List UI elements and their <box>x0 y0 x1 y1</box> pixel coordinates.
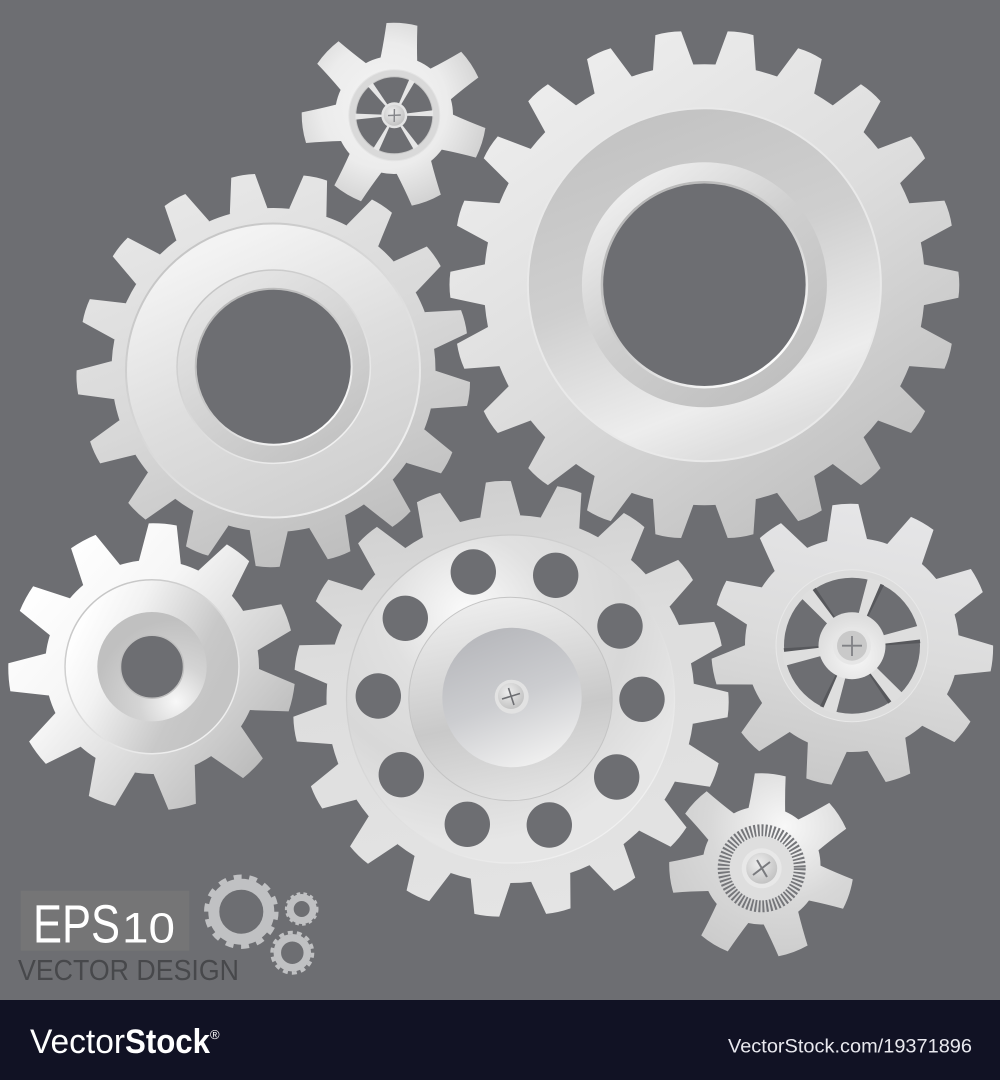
raised disc <box>65 580 239 754</box>
footer logo: VectorStock: Vector <box>30 1023 125 1061</box>
screw <box>495 680 529 714</box>
inner boss <box>409 597 612 801</box>
hole lip <box>582 162 827 407</box>
spokes <box>782 577 922 714</box>
gear: right with six spokes <box>707 500 997 790</box>
footer logo: VectorStock <box>30 1023 220 1061</box>
centre dish <box>442 628 582 767</box>
screw <box>742 848 782 888</box>
spoke ring <box>349 70 440 161</box>
gear: large top right with central hole <box>447 28 961 542</box>
footer logo: VectorStock: ® <box>210 1027 220 1042</box>
gear: large bottom centre with ring of holes <box>288 477 732 921</box>
hole lip <box>97 612 207 721</box>
icon: three small gears <box>206 877 317 973</box>
hole <box>602 182 807 387</box>
spoke ring <box>776 570 928 722</box>
hole <box>196 289 352 445</box>
badge: EPS10: 10 <box>122 905 175 953</box>
ten round holes <box>356 549 665 848</box>
gear: medium left with central hole <box>74 170 474 570</box>
gear: small top with spokes <box>299 20 489 210</box>
hole <box>120 635 184 698</box>
hub <box>818 612 886 679</box>
gear: small bottom right with knurled dial <box>669 773 853 956</box>
gear: left lower bright <box>5 520 299 814</box>
opening <box>356 77 433 154</box>
inner disc <box>730 836 794 900</box>
screw <box>833 627 871 665</box>
badge: EPS10: EPS <box>33 895 120 955</box>
caption: vector design: VECTOR DESIGN <box>18 955 239 987</box>
badge: EPS10 <box>21 891 189 955</box>
recessed disc <box>528 108 881 461</box>
footer bar <box>0 1000 1000 1080</box>
raised disc <box>126 224 420 518</box>
spoke shadows <box>784 580 920 711</box>
opening <box>784 578 920 714</box>
spokes <box>355 79 433 151</box>
footer image id: VectorStock.com/19371896 <box>728 1037 972 1058</box>
footer logo: VectorStock: Stock <box>125 1023 210 1061</box>
screw <box>381 102 407 128</box>
hole lip <box>177 270 370 463</box>
outer ring plate <box>346 535 674 863</box>
knurled ring <box>724 830 800 906</box>
